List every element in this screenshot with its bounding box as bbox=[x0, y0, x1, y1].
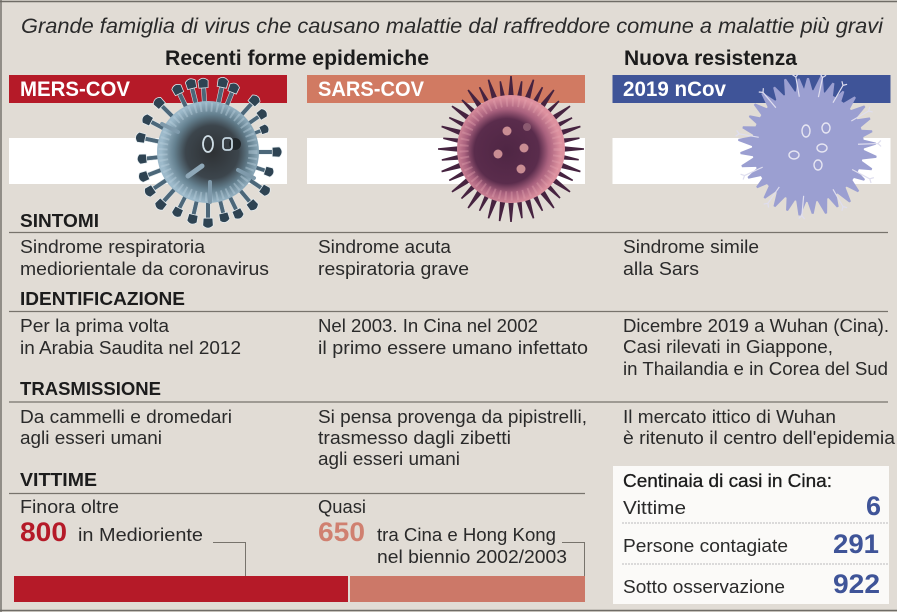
panel: cases in China bbox=[613, 466, 889, 604]
text: MERS symptoms bbox=[20, 236, 269, 279]
text: SARS transmission: Si pensa provenga da pipistrelli, bbox=[318, 406, 587, 427]
text: nCov identification: Dicembre 2019 a Wuhan (Cina). bbox=[623, 315, 889, 336]
bar: MERS victims bbox=[14, 576, 348, 602]
text: MERS transmission bbox=[20, 406, 232, 448]
row: under observation: Sotto osservazione bbox=[623, 576, 785, 597]
text: nCov transmission: è ritenuto il centro dell'epidemia bbox=[623, 427, 896, 448]
text: nCov symptoms: Sindrome simile bbox=[623, 236, 759, 257]
column header: MERS-COV: MERS-COV bbox=[20, 78, 130, 101]
row: infected: Persone contagiate bbox=[623, 535, 788, 556]
row: victims bbox=[623, 491, 881, 521]
text: SARS victims: nel biennio 2002/2003 bbox=[377, 546, 567, 567]
text: SARS identification: il primo essere umano infettato bbox=[318, 337, 588, 358]
row: victims: 6 bbox=[866, 491, 881, 521]
text: nCov transmission: Il mercato ittico di Wuhan bbox=[623, 406, 836, 427]
text: SARS symptoms: respiratoria grave bbox=[318, 258, 469, 279]
text: nCov identification: Casi rilevati in Giappone, bbox=[623, 336, 833, 357]
text: MERS identification: in Arabia Saudita nel 2012 bbox=[20, 337, 241, 358]
white band: SARS bbox=[307, 138, 585, 184]
heading: vittime: VITTIME bbox=[20, 470, 97, 490]
text: MERS victims bbox=[20, 496, 203, 547]
text: nCov identification bbox=[623, 315, 889, 379]
icon: MERS virus bbox=[135, 76, 282, 228]
column header: SARS-COV: SARS-COV bbox=[318, 78, 424, 101]
leader line: MERS bbox=[213, 542, 246, 576]
title: Grande famiglia di virus che causano malattie dal raffreddore comune a malattie più gravi bbox=[21, 15, 884, 38]
panel heading: Centinaia di casi in Cina: bbox=[623, 471, 832, 491]
row: under observation bbox=[623, 569, 880, 599]
icon: SARS virus bbox=[438, 76, 584, 222]
text: SARS victims: Quasi bbox=[318, 496, 366, 517]
row: infected: 291 bbox=[833, 529, 879, 559]
icon: 2019 nCov virus bbox=[736, 74, 881, 219]
bar: SARS victims bbox=[350, 576, 585, 602]
text: SARS victims: 650 bbox=[318, 517, 365, 547]
text: nCov symptoms: alla Sars bbox=[623, 258, 699, 279]
text: SARS symptoms bbox=[318, 236, 469, 279]
text: nCov symptoms bbox=[623, 236, 759, 279]
text: MERS identification bbox=[20, 315, 241, 358]
text: MERS victims: in Medioriente bbox=[78, 524, 203, 545]
text: MERS victims: 800 bbox=[20, 517, 67, 547]
column header: 2019 nCov: 2019 nCov bbox=[623, 78, 726, 101]
leader line: SARS bbox=[562, 542, 584, 576]
text: MERS symptoms: mediorientale da coronavirus bbox=[20, 258, 269, 279]
text: SARS identification: Nel 2003. In Cina nel 2002 bbox=[318, 315, 538, 336]
column header: 2019 nCov bbox=[612, 75, 890, 103]
row: victims: Vittime bbox=[623, 497, 686, 518]
text: SARS identification bbox=[318, 315, 588, 358]
text: SARS transmission: trasmesso dagli zibetti bbox=[318, 427, 511, 448]
text: MERS symptoms: Sindrome respiratoria bbox=[20, 236, 206, 257]
heading: new resistance: Nuova resistenza bbox=[624, 47, 797, 70]
text: nCov transmission bbox=[623, 406, 896, 448]
text: MERS victims: Finora oltre bbox=[20, 496, 119, 517]
heading: recent epidemics: Recenti forme epidemiche bbox=[165, 47, 429, 70]
text: MERS identification: Per la prima volta bbox=[20, 315, 170, 336]
text: MERS transmission: Da cammelli e dromedari bbox=[20, 406, 232, 427]
heading: identificazione: IDENTIFICAZIONE bbox=[20, 289, 185, 309]
text: SARS victims: tra Cina e Hong Kong bbox=[377, 524, 556, 545]
heading: trasmissione: TRASMISSIONE bbox=[20, 379, 161, 399]
column header: SARS-COV bbox=[307, 75, 585, 103]
column header: MERS-COV bbox=[9, 75, 287, 103]
text: SARS symptoms: Sindrome acuta bbox=[318, 236, 452, 257]
text: SARS victims bbox=[318, 496, 567, 567]
text: SARS transmission: agli esseri umani bbox=[318, 448, 460, 469]
white band: nCov bbox=[612, 138, 890, 184]
text: MERS transmission: agli esseri umani bbox=[20, 427, 162, 448]
text: nCov identification: in Thailandia e in Corea del Sud bbox=[623, 358, 888, 379]
text: SARS transmission bbox=[318, 406, 587, 469]
white band: MERS bbox=[9, 138, 287, 184]
heading: sintomi: SINTOMI bbox=[20, 211, 99, 231]
row: under observation: 922 bbox=[833, 569, 880, 599]
row: infected bbox=[623, 529, 879, 559]
